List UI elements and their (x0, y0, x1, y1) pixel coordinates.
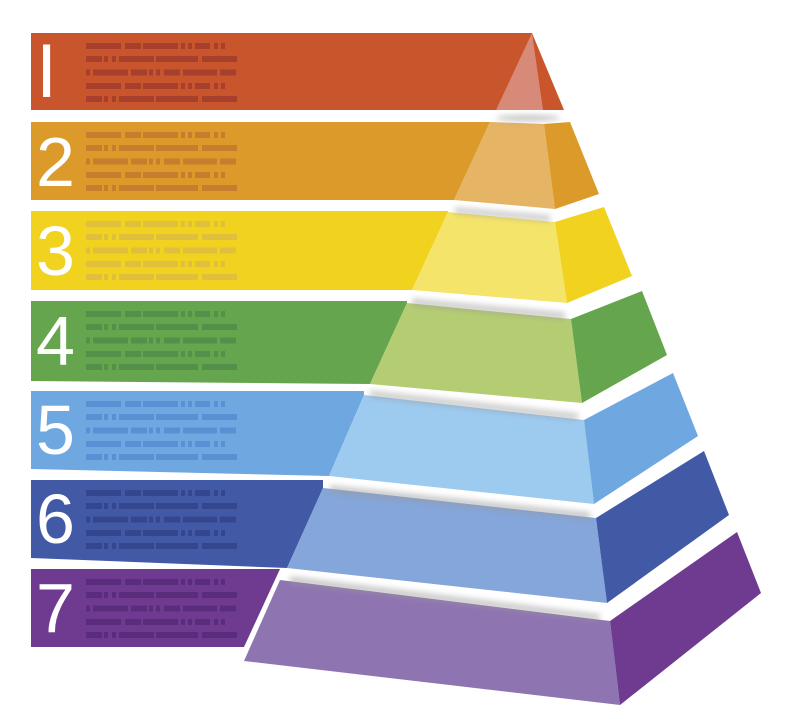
tier 5 (31, 373, 698, 504)
tier 4 (31, 291, 667, 403)
tier 3: 3 (36, 212, 75, 290)
tier 1: I (36, 29, 57, 114)
tier 6: 6 (36, 480, 75, 558)
tier 7: 7 (36, 569, 75, 647)
tier 2 (31, 122, 599, 209)
tier 3 (31, 207, 632, 303)
tier 7 (31, 532, 761, 705)
tier 6 (31, 451, 729, 603)
tier 4: 4 (36, 302, 75, 380)
tier 2: 2 (36, 123, 75, 201)
tier 1 (31, 29, 564, 114)
tier 5: 5 (36, 391, 75, 469)
